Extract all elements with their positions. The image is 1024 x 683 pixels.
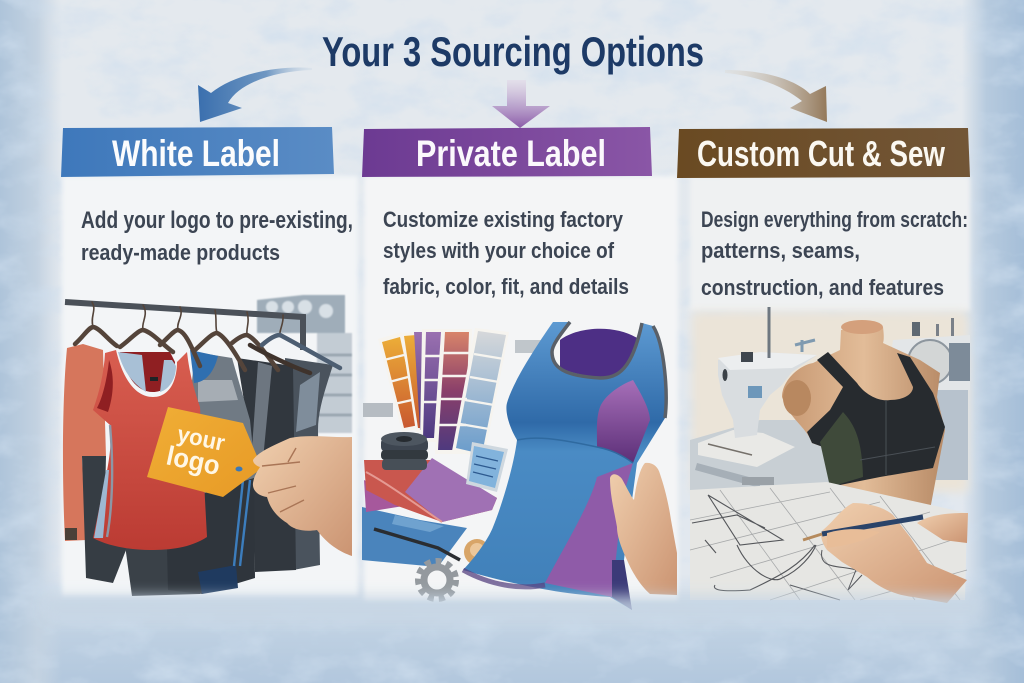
description: custom cut and sew: patterns, seams, bbox=[701, 238, 860, 263]
description: custom cut and sew: construction, and features bbox=[701, 275, 944, 300]
logo tag: logo bbox=[164, 441, 223, 481]
arrow: to custom cut and sew bbox=[725, 70, 827, 122]
arrow: to white label bbox=[198, 68, 312, 122]
heading band: custom cut and sew: Custom Cut & Sew bbox=[697, 133, 946, 174]
dark leggings and shorts bbox=[82, 456, 130, 583]
panel 3 wash bbox=[690, 176, 970, 311]
icon: hand gathering fabric bbox=[610, 463, 677, 595]
description: white label: ready-made products bbox=[81, 240, 280, 265]
icon: hand with pencil bbox=[803, 503, 968, 603]
heading band: private label bbox=[362, 127, 652, 177]
arrow: to private label bbox=[492, 80, 550, 128]
description: private label: fabric, color, fit, and details bbox=[383, 274, 629, 299]
pattern sheet sketch bbox=[690, 482, 967, 600]
clothes rack bbox=[63, 302, 352, 596]
color swatch fan bbox=[363, 328, 545, 458]
panel 1 wash bbox=[62, 176, 358, 596]
icon: sewing machine bbox=[695, 307, 817, 488]
hangers bbox=[75, 302, 340, 373]
heading band: custom cut and sew bbox=[677, 128, 970, 178]
description: private label: styles with your choice of bbox=[383, 238, 615, 263]
table bbox=[690, 420, 830, 495]
second machine bbox=[892, 318, 970, 480]
heading band: private label: Private Label bbox=[416, 133, 606, 174]
description: white label: Add your logo to pre-existing, bbox=[81, 207, 353, 234]
tank top bbox=[463, 322, 666, 610]
orange long sleeve bbox=[63, 344, 106, 541]
mannequin with black sports bra bbox=[782, 320, 945, 510]
logo tag: your bbox=[175, 420, 227, 456]
panel: private label bbox=[362, 127, 678, 610]
heading band: white label bbox=[61, 127, 334, 177]
fabric, spool, phone and notions bbox=[362, 432, 508, 599]
far right grey tank bbox=[285, 358, 333, 570]
workshop backdrop bbox=[692, 312, 968, 492]
title: Your 3 Sourcing Options bbox=[322, 28, 704, 75]
dark tank bbox=[237, 358, 296, 572]
icon: hand holding tag bbox=[253, 436, 352, 556]
bottom fade: panels bbox=[45, 596, 985, 620]
description: private label: Customize existing factory bbox=[383, 207, 624, 232]
heading band: white label: White Label bbox=[112, 133, 280, 174]
panel 2 wash bbox=[364, 176, 678, 601]
panel: custom cut and sew bbox=[677, 128, 974, 603]
logo tag bbox=[147, 407, 262, 497]
panel: white label bbox=[45, 127, 985, 620]
grey tank bbox=[190, 352, 256, 500]
red tank bbox=[93, 350, 207, 550]
factory backdrop bbox=[257, 295, 352, 433]
